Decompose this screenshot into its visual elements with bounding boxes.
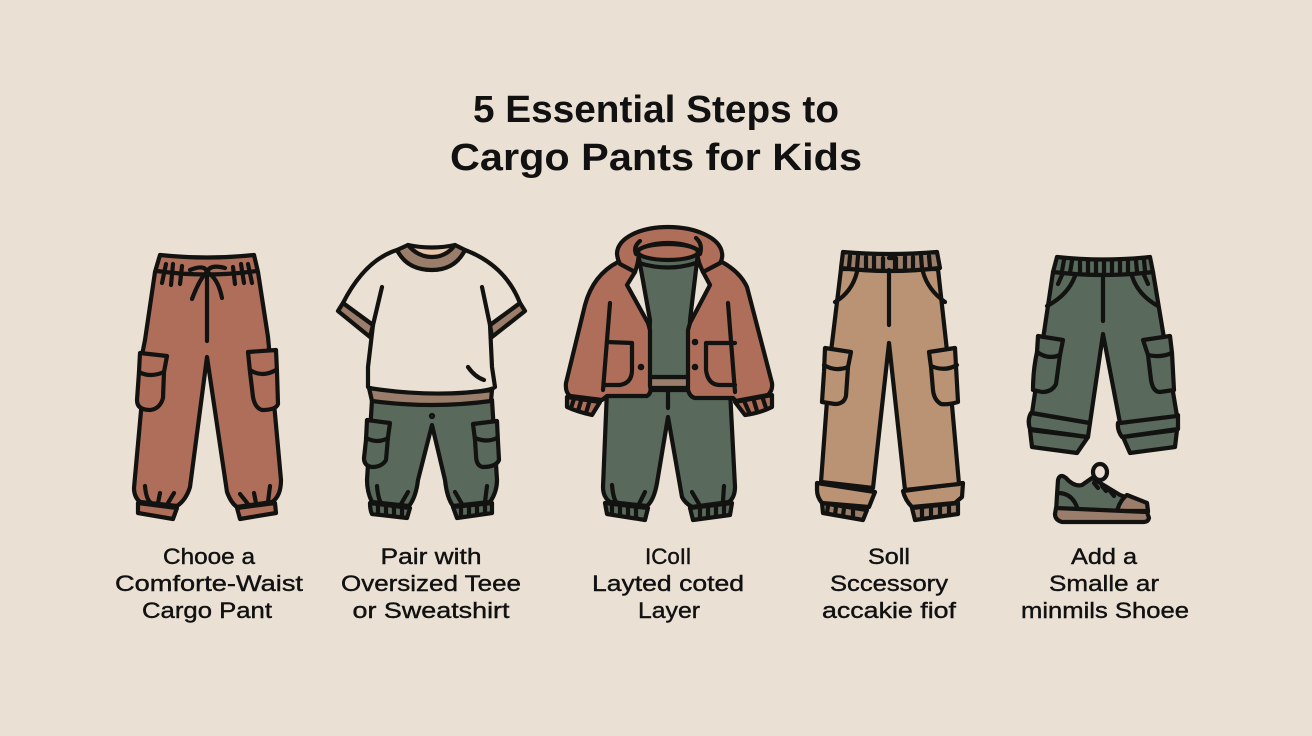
label: step 4: Soll — [868, 544, 910, 569]
label: step 2: Pair with — [380, 544, 482, 569]
label: step 1: Comforte-Waist — [115, 571, 303, 596]
icon: rust drawstring cargo pants — [134, 255, 281, 519]
title: Cargo Pants for Kids — [450, 137, 862, 179]
label: step 4 — [822, 544, 957, 623]
label: step 5: Add a — [1071, 544, 1138, 569]
label: step 4: Sccessory — [830, 571, 948, 596]
label: step 1: Cargo Pant — [142, 598, 272, 623]
label: step 1 — [115, 544, 303, 623]
label: step 4: accakie fiof — [822, 598, 957, 623]
label: step 3: Layted coted — [592, 571, 744, 596]
label: step 3: ICoIl — [645, 544, 691, 569]
title — [450, 89, 862, 179]
label: step 3: Layer — [638, 598, 700, 623]
label: step 5 — [1021, 544, 1189, 623]
label: step 2: or Sweatshirt — [352, 598, 510, 623]
label: step 5: minmils Shoee — [1021, 598, 1189, 623]
icon: green rolled cargo pants — [1029, 257, 1178, 453]
label: step 5: Smalle ar — [1049, 571, 1159, 596]
icon: khaki cuffed cargo pants — [817, 252, 963, 520]
label: step 2 — [341, 544, 521, 623]
icon: oversized tee with green cargo pants — [338, 245, 525, 518]
title: 5 Essential Steps to — [473, 89, 839, 131]
label: step 2: Oversized Teee — [341, 571, 521, 596]
label: step 3 — [592, 544, 744, 623]
icon: hooded jacket outfit — [566, 227, 772, 520]
label: step 1: Chooe a — [163, 544, 256, 569]
icon: minimal sneaker — [1055, 464, 1149, 522]
